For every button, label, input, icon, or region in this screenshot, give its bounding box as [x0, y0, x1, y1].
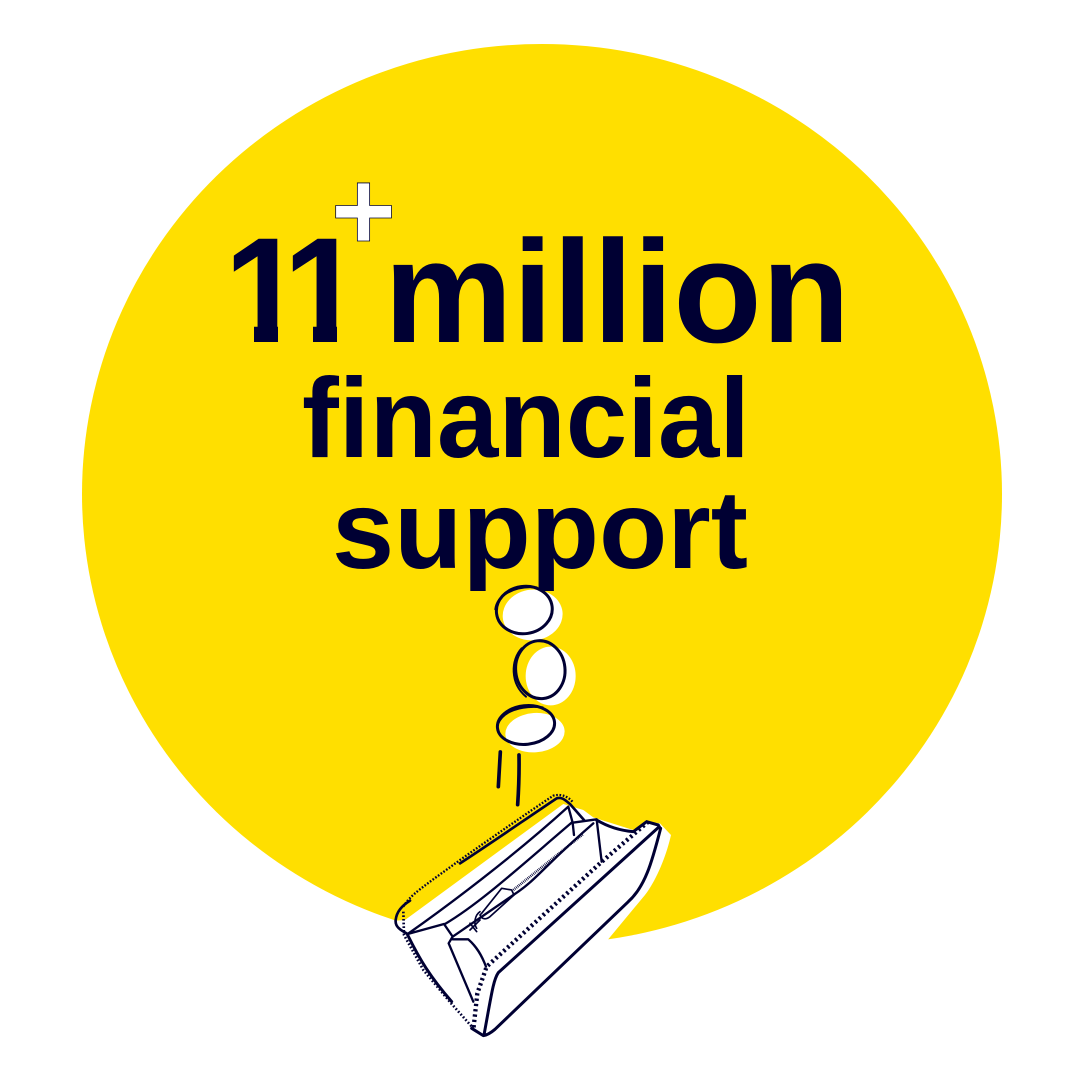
headline: financial support: support [332, 468, 748, 592]
headline: 11+ million: + [331, 148, 396, 275]
infographic canvas [82, 44, 1002, 1038]
motion lines [498, 752, 519, 805]
top edge [396, 798, 584, 934]
zip pull [470, 888, 514, 932]
coin 3 [495, 703, 566, 754]
headline: financial support: financial [302, 355, 750, 481]
icon: open wallet [380, 795, 671, 1050]
large zipper [473, 822, 648, 1030]
front panel outline [408, 820, 661, 1036]
headline: financial support [302, 355, 750, 592]
headline: 11+ million: 1 [283, 206, 363, 374]
inner panels [408, 807, 602, 1002]
coin 1 [493, 583, 565, 643]
fine zipper [513, 834, 583, 890]
wallet white fill and shadow [380, 804, 671, 1050]
headline: 11+ million: million [384, 210, 850, 373]
speech bubble [82, 44, 1002, 944]
coin 2 [513, 638, 576, 705]
headline: 11+ million [234, 182, 842, 344]
icon: falling coins [493, 583, 576, 805]
headline: 11+ million: 1 [224, 206, 304, 374]
dotted stitching [403, 795, 573, 907]
